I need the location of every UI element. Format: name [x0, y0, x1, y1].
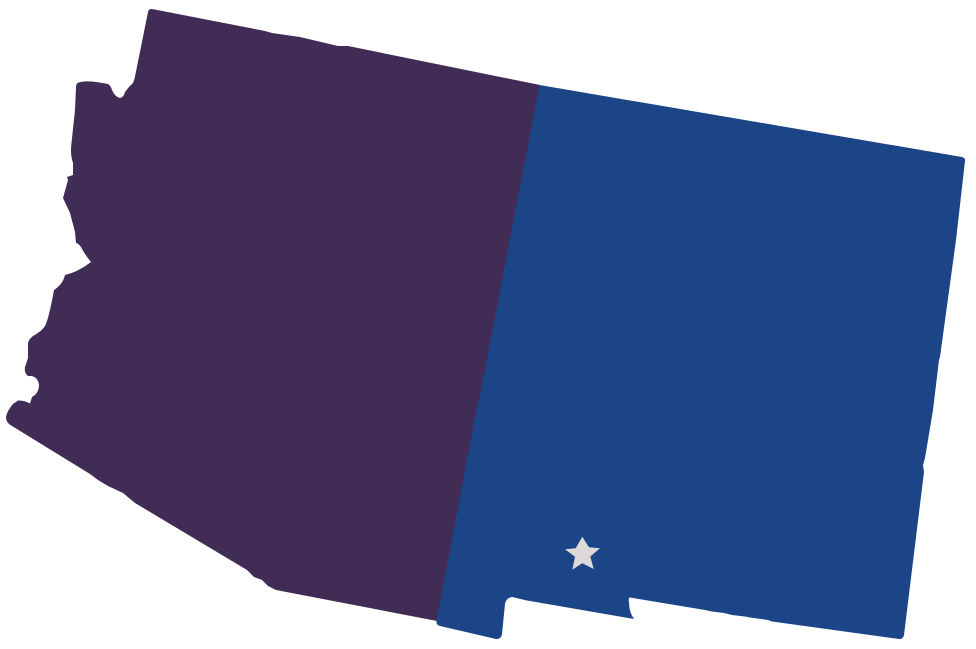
state: Arizona — [6, 9, 540, 621]
state: New Mexico — [436, 85, 965, 639]
icon: capital star — [565, 537, 600, 570]
